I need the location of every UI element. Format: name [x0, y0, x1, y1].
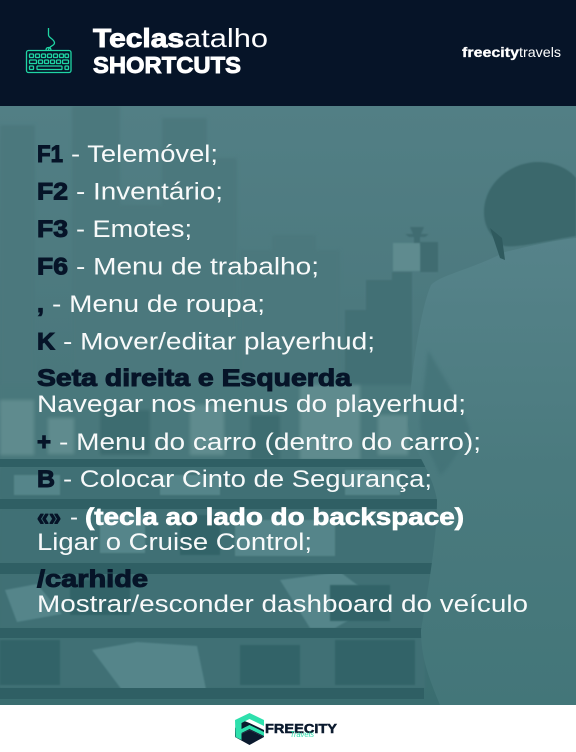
balcony railing bars — [0, 459, 438, 699]
F3 — [37, 216, 192, 243]
arrows left/right: Seta direita e Esquerda — [37, 365, 352, 392]
arrows left/right: Navegar nos menus do playerhud; — [37, 391, 466, 418]
cruise control key: - — [70, 504, 78, 531]
cruise control key: (tecla ao lado do backspace) — [85, 504, 464, 531]
brand wordmark: travels — [519, 44, 561, 60]
F3: F3 — [37, 216, 68, 243]
F2: F2 — [37, 178, 68, 206]
background photo: city skyline and man — [0, 106, 576, 705]
footer — [0, 705, 576, 752]
icon: freecity logo — [235, 713, 264, 745]
F1: - Telemóvel; — [71, 141, 218, 168]
cruise control key: «» — [37, 504, 61, 531]
title: atalho — [184, 23, 268, 53]
logo wordmark: FREECITY — [265, 721, 337, 736]
F6: - Menu de trabalho; — [76, 254, 319, 280]
F2: - Inventário; — [76, 178, 223, 206]
K: - Mover/editar playerhud; — [63, 328, 375, 356]
arrows left/right — [37, 365, 466, 418]
F3: - Emotes; — [76, 216, 192, 243]
plus key: - Menu do carro (dentro do carro); — [59, 429, 481, 456]
F6: F6 — [37, 254, 68, 280]
title: SHORTCUTS — [93, 52, 241, 78]
low city blocks — [0, 385, 430, 465]
K: K — [37, 328, 56, 356]
logo script: Travels — [290, 730, 314, 739]
distant towers — [0, 106, 340, 418]
man: head — [484, 162, 576, 246]
cruise control key: Ligar o Cruise Control; — [37, 529, 312, 556]
shortcut list — [37, 141, 528, 618]
B: - Colocar Cinto de Segurança; — [63, 466, 432, 493]
B: B — [37, 466, 55, 493]
F1: F1 — [37, 141, 63, 168]
comma key: , — [37, 291, 44, 318]
F2 — [37, 178, 223, 206]
mid buildings — [345, 272, 412, 432]
title: Teclas — [93, 23, 184, 53]
plus key: + — [37, 429, 51, 456]
man: body — [408, 238, 576, 705]
icon: keyboard — [26, 28, 71, 72]
/carhide: Mostrar/esconder dashboard do veículo — [37, 591, 528, 618]
comma key: - Menu de roupa; — [52, 291, 265, 318]
/carhide — [37, 566, 528, 618]
tower top — [405, 227, 438, 272]
title — [93, 23, 268, 78]
/carhide: /carhide — [37, 566, 148, 593]
brand wordmark: freecity — [462, 44, 519, 60]
cruise control key — [37, 504, 464, 556]
brand wordmark — [462, 44, 561, 60]
header bar — [0, 0, 576, 106]
